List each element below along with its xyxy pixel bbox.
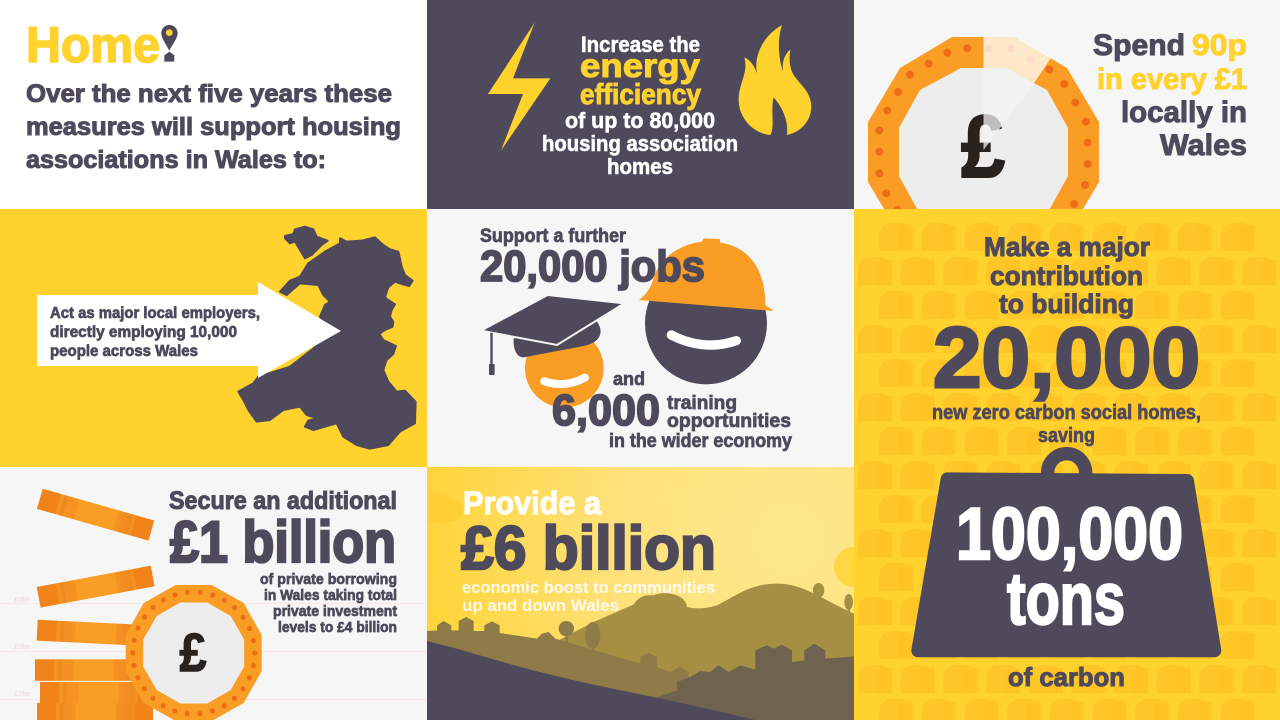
arrow with employers text: directly employing 10,000 [50,324,237,341]
boost text: £6 billion [461,514,716,582]
billion text: Secure an additional [169,487,397,515]
jobs text: 20,000 jobs [480,242,705,291]
homes text: new zero carbon social homes, [932,402,1201,424]
billion text: levels to £4 billion [278,619,397,636]
homes text: contribution [990,261,1143,291]
jobs text [480,226,792,452]
energy text: Increase the [581,32,700,57]
icon: graduate head with mortarboard [481,295,624,408]
map of Wales [238,227,416,449]
spend text: locally in [1121,96,1247,129]
spend text: Spend [1093,29,1185,62]
intro text [26,80,401,174]
icon: weight with carbon figure: tons [1007,559,1125,640]
logo: Home: Home [26,17,160,73]
intro text: measures will support housing [26,113,401,141]
investment scale lines: £3bn [13,642,31,651]
boost text [461,485,716,615]
stack of coins [35,489,156,720]
jobs text: 6,000 [552,386,660,435]
billion text: £1 billion [170,510,396,575]
energy text: efficiency [580,79,701,111]
boost text: Provide a [463,485,601,521]
energy text [542,32,738,179]
homes text: 20,000 [933,311,1200,406]
investment scale lines: £2bn [13,689,31,698]
panel: energy efficiency [427,0,854,209]
homes text: to building [999,289,1134,319]
panel: intro heading [0,0,427,209]
jobs text: training [667,393,737,414]
energy text: homes [607,154,673,179]
panel: additional 1 billion [0,467,427,720]
of carbon text: of carbon [1008,662,1125,692]
icon: worker head with hard hat [639,238,774,384]
intro text: Over the next five years these [26,80,392,108]
icon: lightning bolt [488,23,550,151]
panel: spend 90p [854,0,1280,267]
energy text: of up to 80,000 [565,108,715,133]
jobs text: Support a further [480,226,627,247]
arrow with employers text: Act as major local employers, [50,305,260,322]
icon: pound coin with 10 percent wedge: £ [961,97,1005,196]
billion text: of private borrowing [260,571,397,588]
panel: zero carbon homes [854,209,1280,720]
energy text: housing association [542,131,738,156]
spend text: Wales [1160,129,1247,162]
jobs text: and [613,369,645,389]
energy text: energy [580,47,701,84]
icon: flame [739,25,811,135]
panel: jobs and training [427,209,854,467]
icon: weight with carbon figure [918,454,1215,651]
investment scale lines: £4bn [13,595,31,604]
jobs text: in the wider economy [609,431,792,452]
boost text: economic boost to communities [462,578,715,597]
spend text: 90p [1192,29,1247,62]
investment scale lines [0,595,427,700]
icon: pound coin: £ [179,623,206,683]
billion text [169,487,397,636]
icon: pound coin with 10 percent wedge [868,37,1099,267]
boost text: up and down Wales [462,596,619,615]
homes text: saving [1038,425,1095,447]
billion text: private investment [273,603,397,620]
panel: 6 billion boost [427,467,874,720]
homes text [932,232,1201,447]
panel: local employers [0,209,427,467]
billion text: in Wales taking total [264,587,397,604]
jobs text: opportunities [667,411,791,432]
arrow with employers text [37,282,341,378]
spend text [1093,29,1247,162]
arrow with employers text: people across Wales [50,343,198,360]
icon: weight with carbon figure: 100,000 [956,494,1183,575]
intro text: associations in Wales to: [26,146,326,174]
icon: pound coin [126,585,262,720]
homes text: Make a major [984,232,1150,262]
spend text: in every £1 [1097,63,1247,96]
landscape illustration [427,493,874,720]
